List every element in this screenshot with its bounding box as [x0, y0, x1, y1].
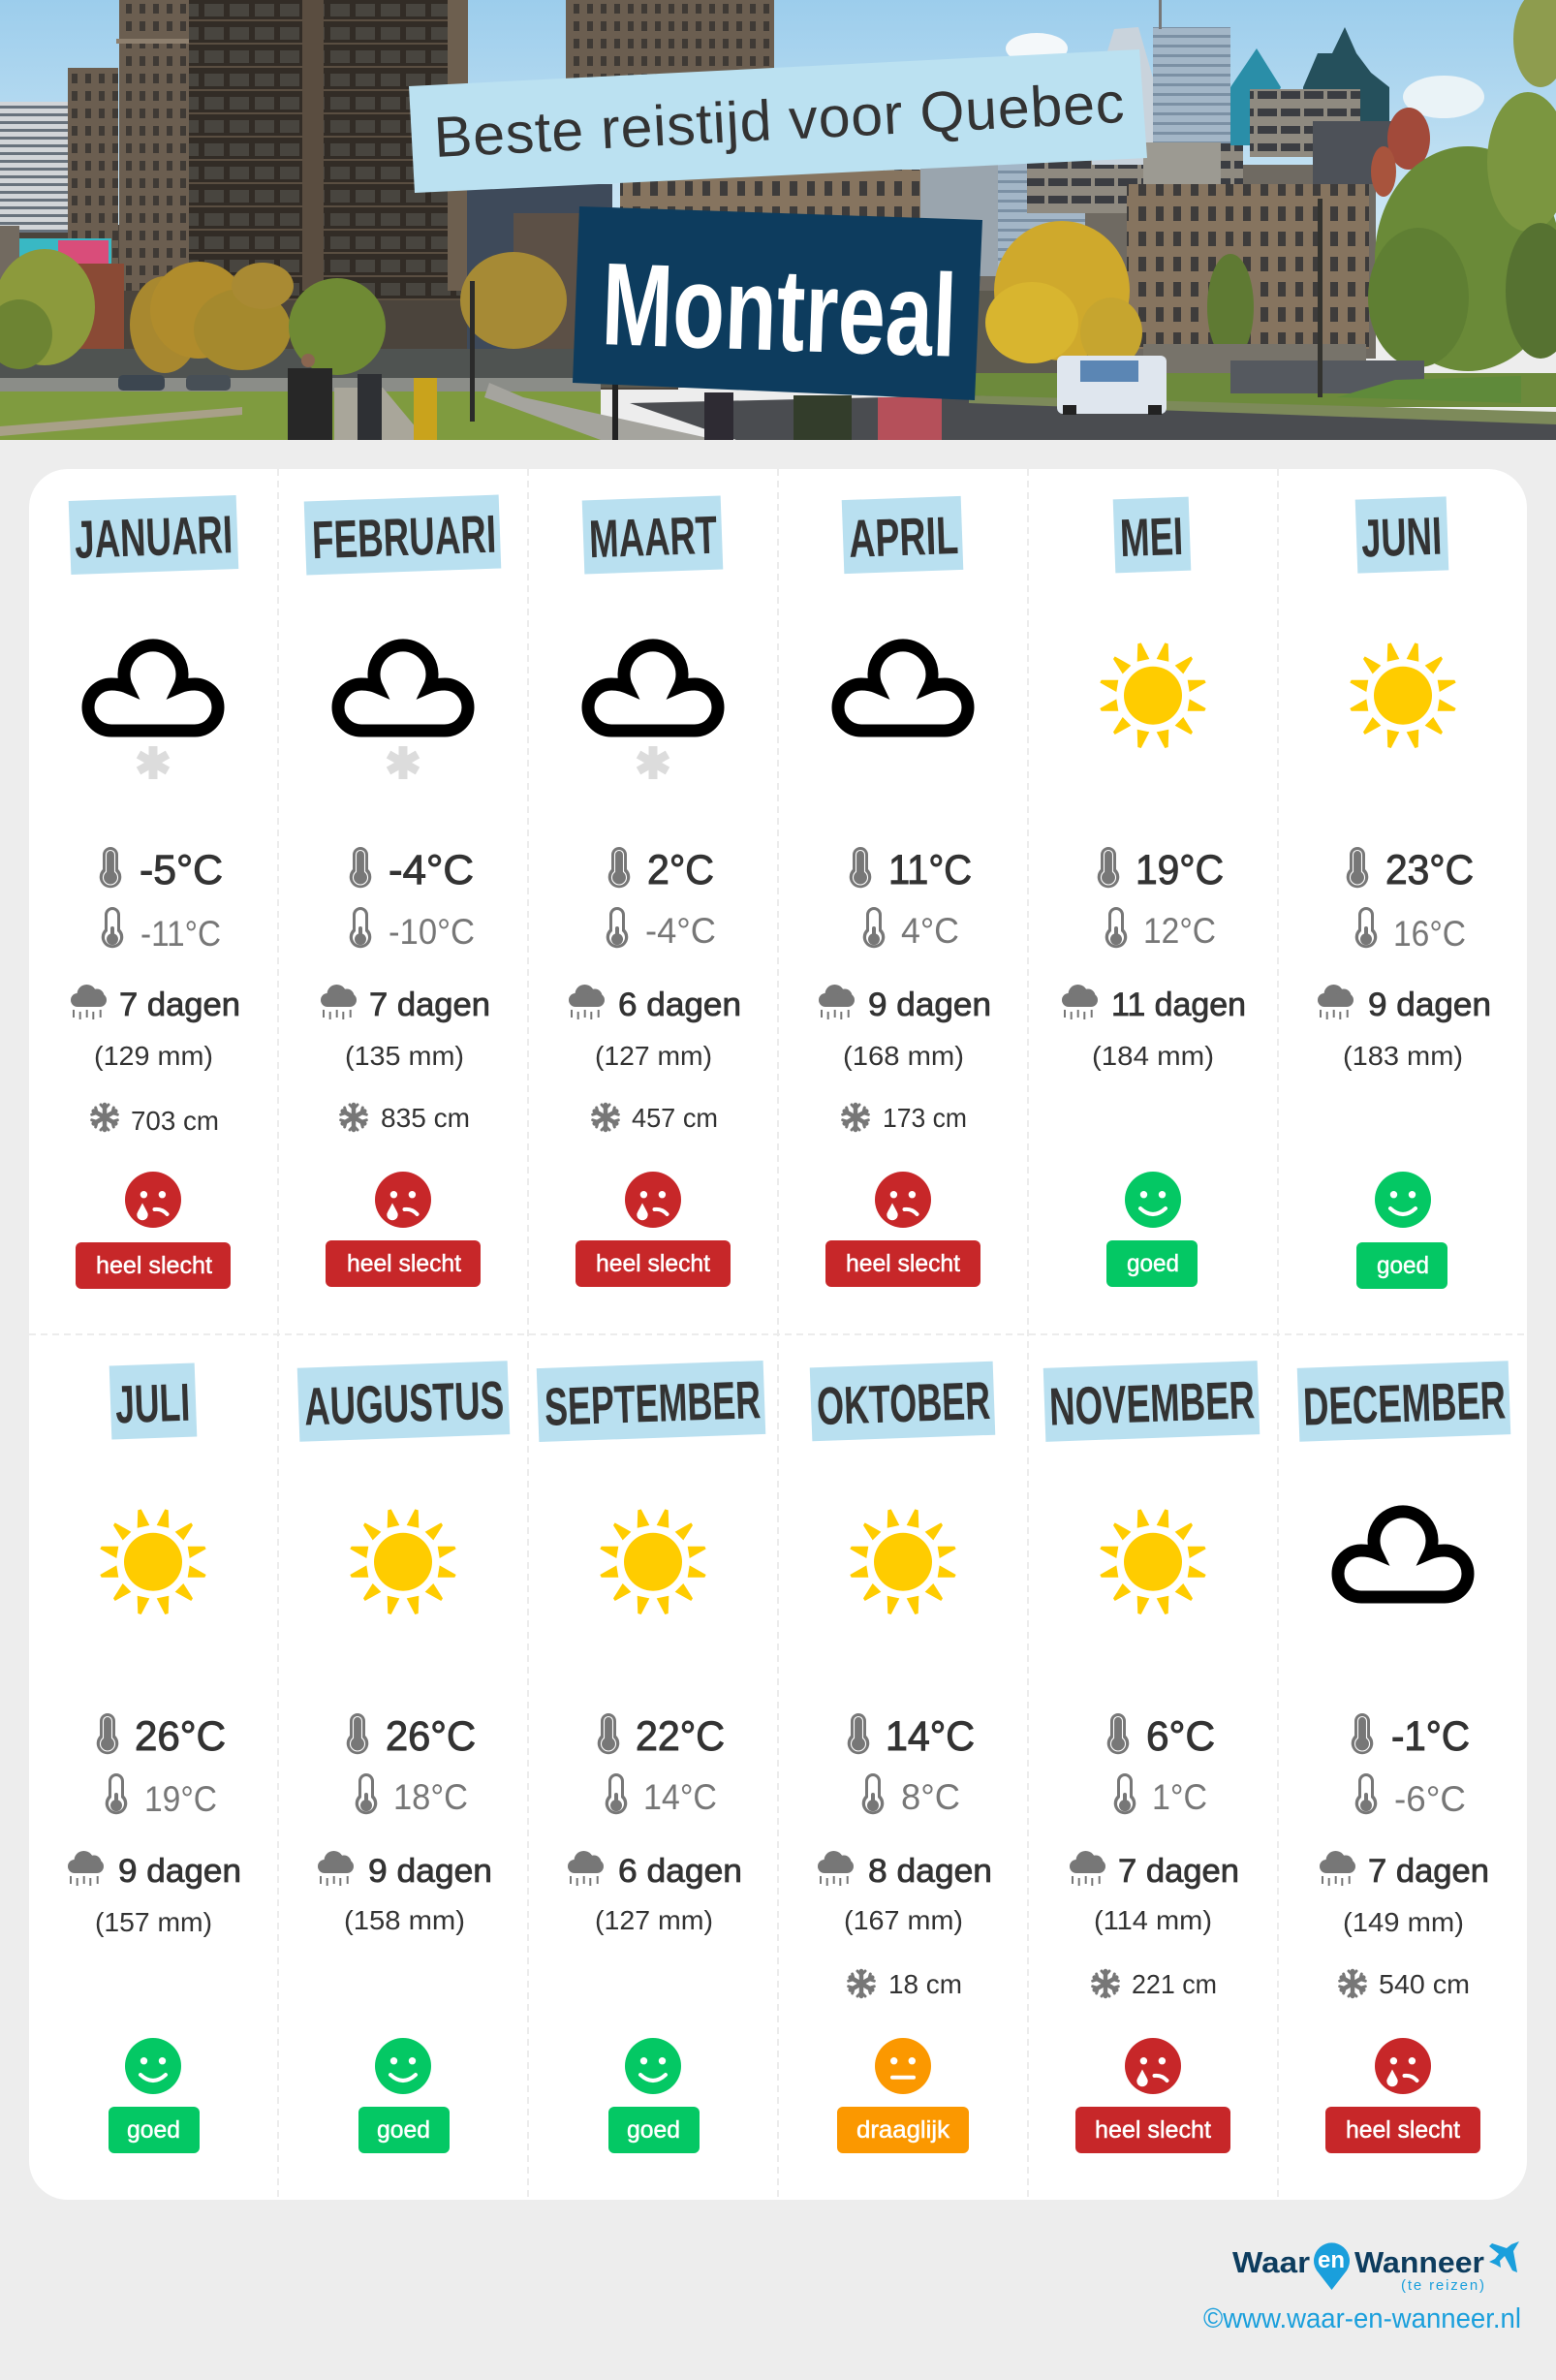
max temperature: 11°C [888, 847, 972, 893]
rating: draaglijk [856, 2116, 950, 2144]
min temperature [863, 907, 959, 951]
min temperature: 1°C [1152, 1777, 1207, 1817]
heading: augustus [297, 1361, 510, 1442]
rating [1106, 1172, 1198, 1287]
max temperature [100, 847, 223, 893]
month: oktober [810, 1362, 995, 2153]
snowfall [341, 1103, 470, 1133]
rainfall: (168 mm) [843, 1041, 964, 1071]
rain days [1062, 985, 1246, 1023]
min temperature: 12°C [1143, 911, 1216, 951]
month: september [537, 1361, 765, 2153]
icon: map pin [1314, 2242, 1350, 2290]
min temperature [1114, 1773, 1207, 1817]
snowfall [1340, 1969, 1470, 1999]
max temperature: -5°C [140, 847, 223, 893]
min temperature [606, 1773, 717, 1817]
rating [1075, 2038, 1230, 2153]
title banner [573, 206, 982, 400]
min temperature [102, 907, 221, 954]
min temperature: 8°C [901, 1777, 960, 1817]
min temperature [1105, 907, 1216, 951]
rain days [568, 1851, 742, 1890]
min temperature [1355, 1773, 1466, 1819]
month: juni [1318, 496, 1491, 1289]
max temperature: 26°C [386, 1713, 476, 1760]
month: maart [569, 496, 741, 1287]
snowfall: 835 cm [381, 1103, 470, 1133]
icon: sun [100, 1509, 206, 1614]
snowfall [593, 1103, 718, 1133]
logo: Waar en Wanneer [1232, 2241, 1519, 2294]
rain days [71, 985, 240, 1023]
max temperature [1098, 847, 1224, 893]
logo: Waar en Wanneer: (te reizen) [1401, 2277, 1484, 2294]
rainfall: (127 mm) [595, 1041, 712, 1071]
min temperature: -4°C [645, 911, 716, 951]
heading: februari: FEBRUARI [311, 504, 497, 570]
snowfall [849, 1969, 962, 1999]
title banner: Montreal [600, 237, 959, 382]
heading: januari: JANUARI [74, 504, 233, 570]
rainfall: (149 mm) [1343, 1907, 1464, 1937]
rating: heel slecht [347, 1250, 461, 1277]
rainfall: (158 mm) [344, 1905, 465, 1935]
icon: sun [1350, 642, 1456, 748]
heading: juli [109, 1362, 197, 1440]
icon: map pin: en [1318, 2247, 1345, 2273]
min temperature: 19°C [144, 1779, 217, 1819]
rating [326, 1172, 481, 1287]
rain days: 9 dagen [118, 1853, 241, 1890]
month: februari [304, 495, 501, 1287]
icon: cloud with snow [588, 645, 718, 779]
max temperature [1352, 1713, 1470, 1760]
header photo: Montreal skyline [0, 0, 1556, 440]
rating: heel slecht [1346, 2116, 1460, 2144]
snowfall: 540 cm [1379, 1969, 1470, 1999]
panel: calendar card [29, 469, 1527, 2200]
rain days [68, 1851, 241, 1890]
min temperature: -6°C [1394, 1779, 1466, 1819]
min temperature [350, 907, 475, 952]
rating: goed [1127, 1250, 1179, 1277]
min temperature: -11°C [140, 914, 221, 954]
rating [576, 1172, 731, 1287]
rainfall: (157 mm) [95, 1907, 212, 1937]
max temperature [848, 1713, 975, 1760]
icon: sun [1100, 642, 1206, 748]
heading: november: NOVEMBER [1048, 1369, 1256, 1437]
icon: cloud with snow [88, 645, 218, 779]
heading: september [537, 1361, 765, 1442]
rainfall: (129 mm) [94, 1041, 213, 1071]
rain days: 9 dagen [1368, 986, 1491, 1023]
heading: juni: JUNI [1360, 506, 1443, 568]
rain days [1320, 1851, 1489, 1890]
rain days [1070, 1851, 1239, 1890]
logo: Waar en Wanneer: Waar [1232, 2245, 1310, 2279]
snowfall: 173 cm [883, 1103, 967, 1133]
max temperature [1107, 1713, 1215, 1760]
rain days: 8 dagen [868, 1853, 992, 1890]
rating: heel slecht [96, 1252, 212, 1279]
max temperature [850, 847, 972, 893]
rating: goed [627, 2116, 680, 2144]
snowfall: 221 cm [1132, 1969, 1217, 1999]
max temperature: 22°C [636, 1713, 725, 1760]
rain days: 9 dagen [868, 986, 991, 1023]
month: januari [69, 495, 240, 1289]
min temperature [106, 1773, 217, 1819]
snowfall [92, 1105, 219, 1136]
rain days: 7 dagen [369, 986, 490, 1023]
snowfall [843, 1103, 967, 1133]
heading: januari [69, 495, 238, 575]
rain days: 6 dagen [618, 986, 741, 1023]
rating [76, 1172, 231, 1289]
month: mei [1062, 497, 1246, 1287]
rainfall: (127 mm) [595, 1905, 713, 1935]
icon: cloud [1338, 1512, 1468, 1597]
rating [608, 2038, 700, 2153]
min temperature [607, 907, 716, 951]
month: december [1297, 1361, 1510, 2153]
subtitle banner: Beste reistijd voor Quebec [432, 71, 1126, 170]
max temperature [1347, 847, 1474, 893]
icon: sun [600, 1509, 706, 1614]
min temperature [862, 1773, 960, 1817]
rain days [569, 985, 741, 1023]
month: juli [68, 1362, 241, 2153]
rain days [818, 1851, 992, 1890]
snowfall: 18 cm [888, 1969, 962, 1999]
rainfall: (183 mm) [1343, 1041, 1463, 1071]
max temperature [598, 1713, 725, 1760]
max temperature: 26°C [135, 1713, 226, 1760]
heading: april [842, 496, 963, 574]
rating: heel slecht [596, 1250, 710, 1277]
icon: airplane [1489, 2241, 1519, 2272]
icon: cloud [838, 645, 968, 731]
rating: goed [1377, 1252, 1429, 1279]
heading: mei: MEI [1119, 506, 1184, 568]
min temperature [356, 1773, 468, 1817]
max temperature: 23°C [1385, 847, 1474, 893]
max temperature: -1°C [1391, 1713, 1470, 1760]
rating [358, 2038, 450, 2153]
subtitle banner [409, 49, 1147, 193]
rain days [819, 985, 991, 1023]
max temperature [97, 1713, 226, 1760]
min temperature: 16°C [1393, 914, 1466, 954]
rating: goed [377, 2116, 430, 2144]
logo: Waar en Wanneer: Wanneer [1354, 2245, 1484, 2279]
max temperature: 6°C [1146, 1713, 1215, 1760]
icon: sun [350, 1509, 456, 1614]
min temperature: 14°C [643, 1777, 717, 1817]
heading: maart [582, 496, 723, 574]
rainfall: (114 mm) [1094, 1905, 1212, 1935]
heading: februari [304, 495, 501, 576]
max temperature: 2°C [647, 847, 714, 893]
rain days [318, 1851, 492, 1890]
rating [1325, 2038, 1480, 2153]
max temperature [608, 847, 714, 893]
max temperature: 19°C [1136, 847, 1224, 893]
heading: november [1043, 1361, 1260, 1442]
max temperature: 14°C [886, 1713, 975, 1760]
snowfall: 457 cm [632, 1103, 718, 1133]
heading: maart: MAART [588, 505, 718, 569]
max temperature: -4°C [389, 847, 474, 893]
min temperature: 4°C [901, 911, 959, 951]
rain days: 7 dagen [119, 986, 240, 1023]
rain days: 11 dagen [1111, 986, 1246, 1023]
rain days [321, 985, 490, 1023]
snowfall: 703 cm [131, 1106, 219, 1136]
rating: goed [127, 2116, 180, 2144]
icon: sun [1100, 1509, 1206, 1614]
month: april [819, 496, 991, 1287]
rating [109, 2038, 200, 2153]
min temperature [1355, 907, 1466, 954]
min temperature: 18°C [393, 1777, 468, 1817]
min temperature: -10°C [389, 912, 475, 952]
heading: juni [1355, 496, 1448, 574]
rating [1356, 1172, 1447, 1289]
month: november [1043, 1361, 1260, 2153]
heading: april: APRIL [848, 505, 959, 569]
heading: augustus: AUGUSTUS [303, 1369, 505, 1437]
heading: oktober [810, 1362, 995, 1441]
heading: oktober: OKTOBER [816, 1370, 991, 1436]
rating: heel slecht [846, 1250, 960, 1277]
rain days: 7 dagen [1118, 1853, 1239, 1890]
heading: mei [1113, 497, 1191, 573]
heading: september: SEPTEMBER [544, 1369, 762, 1437]
grid dividers [29, 469, 1527, 2200]
icon: cloud with snow [338, 645, 468, 779]
max temperature [347, 1713, 476, 1760]
rating [825, 1172, 980, 1287]
rainfall: (167 mm) [844, 1905, 963, 1935]
heading: juli: JULI [114, 1372, 191, 1434]
rain days: 9 dagen [368, 1853, 492, 1890]
rating: heel slecht [1095, 2116, 1211, 2144]
month: augustus [297, 1361, 510, 2153]
icon: sun [850, 1509, 956, 1614]
rating [837, 2038, 969, 2153]
rainfall: (184 mm) [1092, 1041, 1214, 1071]
rain days: 6 dagen [618, 1853, 742, 1890]
snowfall [1093, 1969, 1217, 1999]
rain days [1318, 985, 1491, 1023]
rainfall: (135 mm) [345, 1041, 464, 1071]
website credit: ©www.waar-en-wanneer.nl [1203, 2303, 1521, 2334]
rain days: 7 dagen [1368, 1853, 1489, 1890]
max temperature [350, 847, 474, 893]
